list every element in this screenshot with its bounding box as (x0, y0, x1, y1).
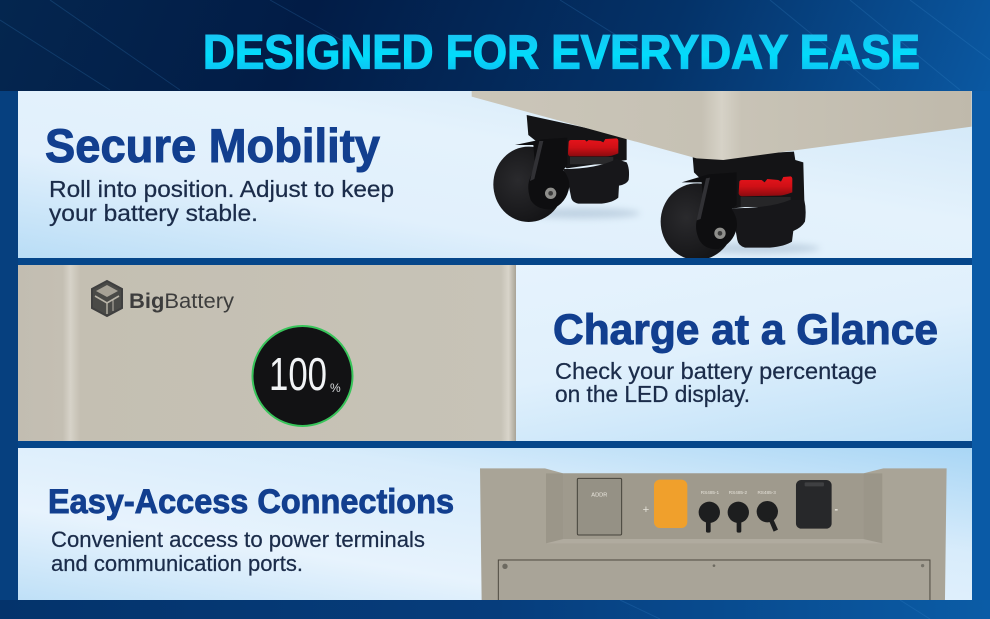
text: secure mobility description: Roll into position. Adjust to keep (49, 176, 394, 202)
communication ports: RS485-2 (729, 490, 748, 495)
image: battery base with casters (472, 91, 972, 260)
battery underside (472, 91, 972, 160)
ADDR plate (577, 478, 622, 535)
panel: easy-access connections (18, 448, 972, 603)
panel: charge at a glance (18, 265, 972, 441)
caster: front (661, 152, 806, 260)
text: charge description: Check your battery percentage (555, 358, 877, 384)
negative terminal (796, 480, 839, 529)
LED display: 100 (269, 348, 327, 400)
title: DESIGNED FOR EVERYDAY EASE (203, 26, 920, 80)
text: charge description: on the LED display. (555, 381, 750, 407)
text: charge description (555, 358, 877, 407)
image: battery terminal panel (480, 468, 947, 603)
positive terminal (643, 480, 687, 528)
LED display: % (330, 381, 341, 395)
image: battery front face (18, 265, 516, 441)
communication ports: RS485-1 (701, 490, 720, 495)
heading: secure mobility: Secure Mobility (45, 119, 380, 172)
negative terminal: - (835, 503, 839, 515)
LED display (252, 326, 352, 426)
text: connections description (51, 527, 425, 576)
positive terminal: + (643, 504, 650, 516)
communication ports: RS485-3 (757, 490, 776, 495)
text: secure mobility description: your battery stable. (49, 200, 258, 226)
heading: charge at a glance: Charge at a Glance (553, 306, 938, 354)
text: connections description: Convenient access to power terminals (51, 527, 425, 552)
ADDR plate: ADDR (591, 493, 607, 499)
heading: easy-access connections: Easy-Access Connections (48, 483, 454, 521)
caster: rear (493, 115, 629, 222)
text: connections description: and communication ports. (51, 551, 303, 576)
panel: secure mobility (18, 91, 972, 260)
logo: BigBattery: BigBattery (129, 290, 235, 313)
icon: battery cube hexagon (92, 281, 122, 316)
communication ports (699, 490, 778, 533)
logo: BigBattery (92, 281, 235, 316)
text: secure mobility description (49, 176, 394, 226)
